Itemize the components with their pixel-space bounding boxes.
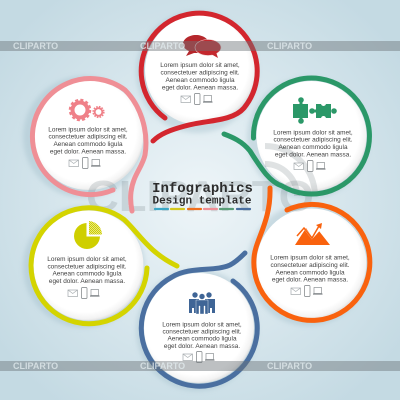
text: blue panel: eget dolor. Aenean massa. <box>164 343 240 350</box>
panel: yellow ring <box>31 208 177 324</box>
watermark: top stripe: CLIPARTO <box>13 41 58 51</box>
text: blue panel: Lorem ipsum dolor sit amet, <box>162 322 242 328</box>
title: Infographics <box>152 181 253 197</box>
icons: red panel <box>181 94 212 104</box>
text: red panel: eget dolor. Aenean massa. <box>162 84 238 92</box>
text: yellow panel: Lorem ipsum dolor sit amet, <box>47 256 127 263</box>
panel: orange ring <box>254 188 370 320</box>
text: pink panel: eget dolor. Aenean massa. <box>50 148 126 156</box>
text: green panel: Aenean commodo ligula <box>278 144 348 151</box>
text: orange panel: eget dolor. Aenean massa. <box>272 276 348 284</box>
text: yellow panel: eget dolor. Aenean massa. <box>49 278 125 285</box>
icons: orange panel <box>291 286 322 296</box>
icon: mountain chart <box>295 223 330 245</box>
text: pink panel: Aenean commodo ligula <box>53 141 123 148</box>
icon: speech bubbles <box>183 35 221 58</box>
text: green panel: eget dolor. Aenean massa. <box>275 152 351 158</box>
text: green panel: consectetuer adipiscing elit. <box>273 136 353 144</box>
watermark: top stripe <box>0 41 400 51</box>
text: blue panel: Aenean commodo ligula <box>167 336 237 342</box>
colour bars <box>155 208 250 210</box>
text: green panel: Lorem ipsum dolor sit amet, <box>273 130 353 136</box>
white discs <box>34 15 366 383</box>
text: yellow panel: Aenean commodo ligula <box>52 270 122 278</box>
watermark: central: CLIPARTO <box>86 172 314 221</box>
watermark: bottom stripe: CLIPARTO <box>140 361 185 371</box>
icon: gears <box>70 100 104 120</box>
text: pink panel: Lorem ipsum dolor sit amet, <box>48 126 128 134</box>
watermark: bottom stripe <box>0 361 400 371</box>
text: orange panel: Lorem ipsum dolor sit amet, <box>270 254 350 262</box>
title: Design template <box>152 196 252 208</box>
panel: pink ring <box>32 79 146 211</box>
panel: red ring <box>141 13 257 141</box>
title <box>152 181 253 208</box>
icon: puzzle <box>293 97 337 124</box>
watermark: top stripe: CLIPARTO <box>267 41 312 51</box>
text: orange panel: Aenean commodo ligula <box>275 270 345 276</box>
icons: green panel <box>294 160 326 172</box>
text: yellow panel: consectetuer adipiscing elit. <box>47 264 127 270</box>
icons: pink panel <box>69 158 100 168</box>
watermark: central <box>86 146 315 221</box>
panel: blue ring <box>141 253 257 386</box>
text: red panel: Aenean commodo ligula <box>165 77 235 84</box>
icons: yellow panel <box>68 288 100 298</box>
watermark: bottom stripe: CLIPARTO <box>13 361 58 371</box>
icon: team <box>189 292 215 314</box>
icon: pie chart <box>74 221 102 249</box>
panel: green ring <box>224 78 369 194</box>
watermark: bottom stripe: CLIPARTO <box>267 361 312 371</box>
text: red panel: Lorem ipsum dolor sit amet, <box>160 62 240 69</box>
text: red panel: consectetuer adipiscing elit. <box>160 70 240 76</box>
text: orange panel: consectetuer adipiscing elit. <box>270 262 350 269</box>
watermark: top stripe: CLIPARTO <box>140 41 185 51</box>
text: blue panel: consectetuer adipiscing elit. <box>162 328 242 336</box>
text: pink panel: consectetuer adipiscing elit. <box>48 134 128 140</box>
icons: blue panel <box>183 352 214 362</box>
